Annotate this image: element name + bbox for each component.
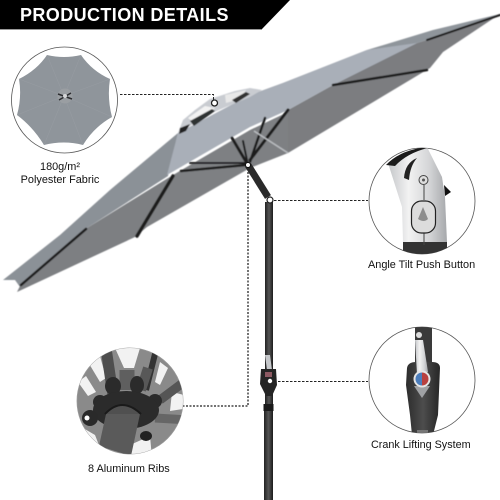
label: tilt button: Angle Tilt Push Button (368, 259, 475, 271)
circle outline (12, 47, 118, 153)
label: crank: Crank Lifting System (371, 439, 471, 451)
canopy right upper band (250, 14, 500, 95)
panel: ribs detail (77, 348, 190, 458)
canopy left lower panel (17, 175, 173, 292)
pivot joint (246, 162, 250, 168)
crank on pole (260, 355, 277, 396)
panel: tilt button detail (369, 147, 475, 255)
circle outline (369, 148, 475, 254)
panel: fabric detail (12, 47, 118, 153)
marker: tilt button (267, 197, 273, 203)
title: PRODUCTION DETAILS (20, 5, 229, 25)
canopy light centre panel (167, 43, 417, 175)
header banner (0, 0, 290, 30)
label: ribs: 8 Aluminum Ribs (88, 463, 170, 475)
connector: tilt button (274, 200, 368, 202)
circle outline (77, 348, 183, 454)
icon: crank handle (406, 326, 440, 436)
umbrella pole (264, 202, 274, 500)
label: fabric: Polyester Fabric (21, 174, 100, 186)
canopy underside panel (135, 112, 288, 237)
canopy left upper panel (3, 133, 178, 287)
icon: hub and ribs (80, 348, 183, 454)
label: fabric: 180g/m² (40, 161, 80, 173)
connector: crank (274, 380, 368, 382)
icon: canopy top view (17, 55, 112, 145)
tilt arm (248, 165, 268, 197)
panel: crank detail (369, 326, 475, 436)
connector: ribs (183, 172, 248, 406)
canopy top cap (178, 88, 262, 134)
marker: fabric (212, 100, 218, 106)
canopy ribs (21, 15, 500, 285)
connector: fabric (120, 94, 214, 100)
umbrella canopy (3, 14, 500, 292)
circle outline (369, 327, 475, 433)
icon: tilt mechanism (386, 147, 451, 255)
canopy right lower panel (288, 14, 500, 153)
